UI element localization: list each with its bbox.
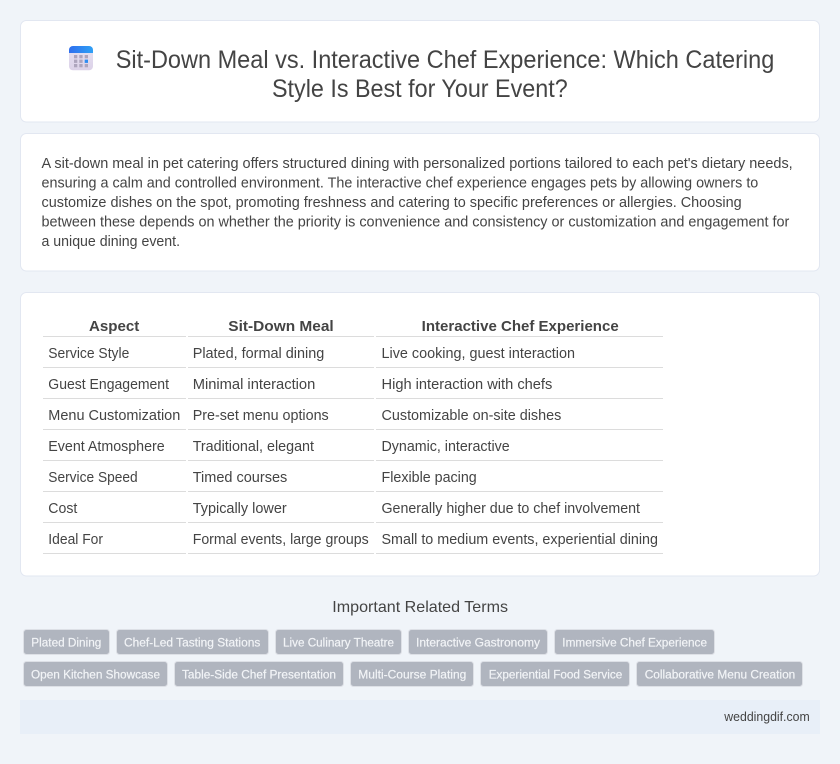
row: service speed: Timed courses <box>193 470 287 486</box>
panel: summary text <box>20 134 820 271</box>
tag: plated dining <box>24 630 110 654</box>
related terms heading: Important Related Terms <box>332 599 508 616</box>
row: ideal for: Ideal For <box>48 532 103 548</box>
summary paragraph: customize dishes on the spot, promoting freshness and catering to specific preferences or allergies. Choosing <box>42 195 742 211</box>
row: guest engagement: Guest Engagement <box>48 377 170 393</box>
tag: table-side chef presentation: Table-Side Chef Presentation <box>182 668 336 682</box>
tag: interactive gastronomy: Interactive Gastronomy <box>416 636 541 650</box>
tag: chef-led tasting stations <box>116 630 268 654</box>
tag: table-side chef presentation <box>174 662 344 686</box>
summary paragraph <box>42 156 793 250</box>
footer: weddingdif.com <box>723 709 810 724</box>
summary paragraph: a unique dining event. <box>42 234 180 250</box>
tag: experiential food service: Experiential Food Service <box>489 668 622 682</box>
row: cost: Cost <box>48 501 78 517</box>
row: service style: Live cooking, guest interaction <box>382 346 575 362</box>
row: menu customization <box>48 408 561 424</box>
tag: plated dining: Plated Dining <box>31 636 101 650</box>
header panel <box>20 20 820 122</box>
row: ideal for: Small to medium events, experiential dining <box>382 532 658 548</box>
table header row: Sit-Down Meal <box>228 319 334 335</box>
footer <box>20 700 820 734</box>
tag: immersive chef experience <box>554 630 714 654</box>
panel: comparison table <box>20 292 820 576</box>
row: menu customization: Pre-set menu options <box>193 408 329 424</box>
title <box>116 46 774 103</box>
icon: calendar <box>69 46 93 70</box>
tag: live culinary theatre: Live Culinary Theatre <box>283 636 394 650</box>
row: service style: Service Style <box>48 346 129 362</box>
row: event atmosphere: Traditional, elegant <box>193 439 315 455</box>
tag: live culinary theatre <box>276 630 402 654</box>
tag: open kitchen showcase: Open Kitchen Showcase <box>31 668 160 682</box>
row: ideal for: Formal events, large groups <box>193 532 369 548</box>
tag: collaborative menu creation: Collaborative Menu Creation <box>645 668 795 682</box>
table header row: Interactive Chef Experience <box>422 319 619 335</box>
row: service speed <box>48 470 477 486</box>
table header row <box>89 319 619 335</box>
tag: collaborative menu creation <box>636 662 802 686</box>
row: service speed: Service Speed <box>48 470 138 486</box>
row: ideal for <box>48 532 658 548</box>
row: service speed: Flexible pacing <box>382 470 477 486</box>
tag: experiential food service <box>480 662 630 686</box>
tag: open kitchen showcase <box>24 662 168 686</box>
title: Sit-Down Meal vs. Interactive Chef Experience: Which Catering <box>116 46 774 74</box>
tag: multi-course plating <box>350 662 474 686</box>
row: cost: Typically lower <box>193 501 287 517</box>
related terms tags <box>24 630 802 686</box>
row: service style <box>48 346 575 362</box>
row: guest engagement: Minimal interaction <box>193 377 315 393</box>
row: event atmosphere <box>48 439 510 455</box>
row: cost: Generally higher due to chef involvement <box>382 501 641 517</box>
title: Style Is Best for Your Event? <box>272 75 568 103</box>
row: event atmosphere: Dynamic, interactive <box>382 439 510 455</box>
row: event atmosphere: Event Atmosphere <box>48 439 165 455</box>
row: menu customization: Customizable on-site dishes <box>382 408 561 424</box>
row: service style: Plated, formal dining <box>193 346 324 362</box>
tag: interactive gastronomy <box>408 630 548 654</box>
summary paragraph: ensuring a calm and controlled environment. The interactive chef experience engages pets by allowing owners to <box>42 176 758 192</box>
row: guest engagement <box>48 377 552 393</box>
tag: immersive chef experience: Immersive Chef Experience <box>562 636 707 650</box>
row: menu customization: Menu Customization <box>48 408 180 424</box>
row: guest engagement: High interaction with chefs <box>382 377 552 393</box>
row: cost <box>48 501 641 517</box>
table header row: Aspect <box>89 319 139 335</box>
tag: multi-course plating: Multi-Course Plating <box>358 668 466 682</box>
tag: chef-led tasting stations: Chef-Led Tasting Stations <box>124 636 260 650</box>
summary paragraph: A sit-down meal in pet catering offers structured dining with personalized portions tailored to each pet's dietary needs, <box>42 156 793 172</box>
summary paragraph: between these depends on whether the priority is convenience and consistency or customization and engagement for <box>42 214 789 230</box>
